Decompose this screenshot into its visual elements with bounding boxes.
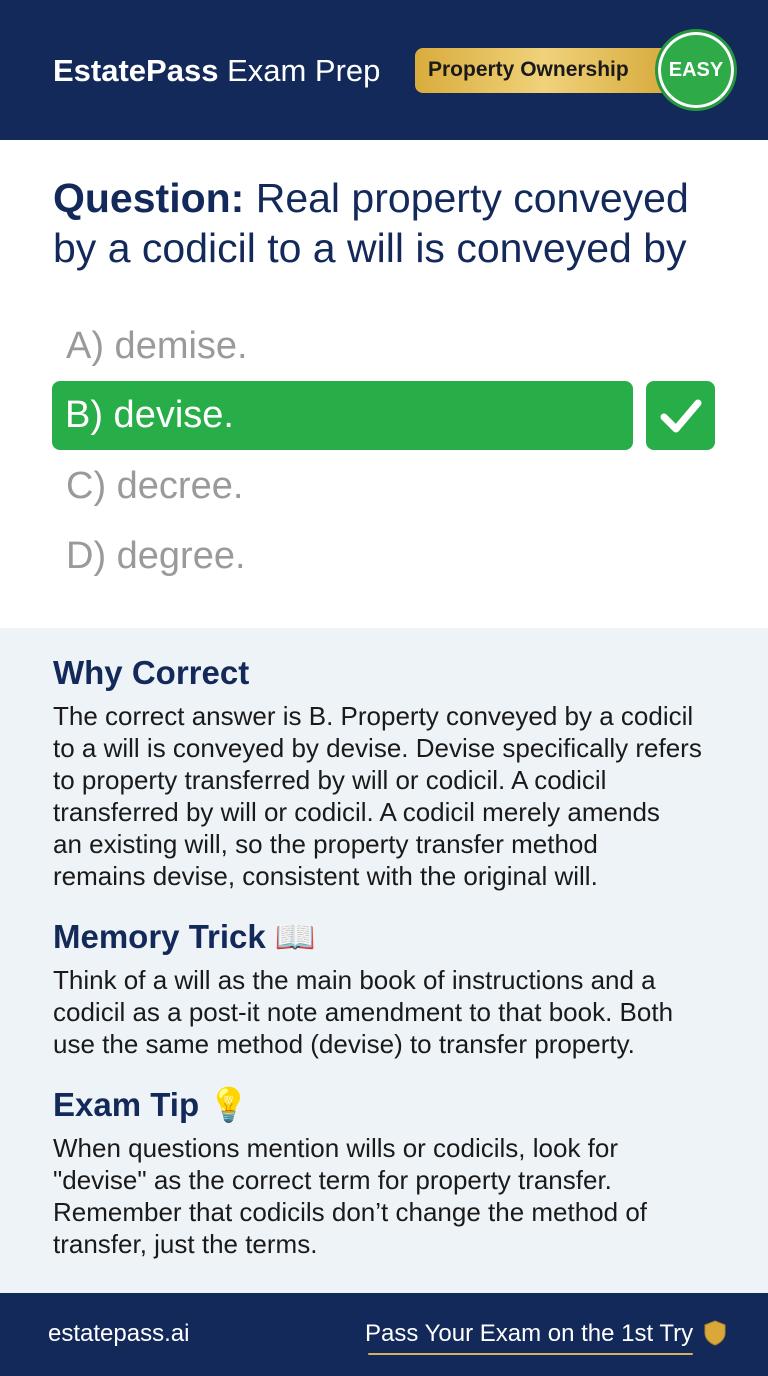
text: exam tip: Remember that codicils don’t change the method of [53,1197,647,1227]
question: by a codicil to a will is conveyed by [53,225,687,271]
explanation panel [0,628,768,1293]
text: why correct: remains devise, consistent with the original will. [53,861,598,891]
heading: memory trick: Memory Trick 📖 [53,918,316,955]
text: exam tip: When questions mention wills or codicils, look for [53,1133,618,1163]
text: memory trick: codicil as a post-it note amendment to that book. Both [53,997,673,1027]
text: exam tip [53,1133,647,1259]
heading: exam tip: Exam Tip 💡 [53,1086,249,1123]
underline [368,1353,693,1355]
text: memory trick [53,965,673,1059]
option C: C) decree. [66,465,243,507]
footer [0,1293,768,1376]
header bar [0,0,768,140]
text: memory trick: Think of a will as the main book of instructions and a [53,965,656,995]
text: exam tip: "devise" as the correct term for property transfer. [53,1165,612,1195]
text: why correct: transferred by will or codicil. A codicil merely amends [53,797,660,827]
option B correct [52,381,633,450]
heading: why correct: Why Correct [53,654,249,691]
text: why correct: to property transferred by will or codicil. A codicil [53,765,606,795]
icon: shield [704,1320,726,1346]
text: memory trick: use the same method (devise) to transfer property. [53,1029,635,1059]
text: why correct [53,701,702,891]
footer url: estatepass.ai [48,1320,189,1347]
text: exam tip: transfer, just the terms. [53,1229,317,1259]
topic badge: Property Ownership [428,58,629,81]
brand title: EstatePass Exam Prep [53,53,380,88]
text: why correct: The correct answer is B. Property conveyed by a codicil [53,701,693,731]
option B correct: B) devise. [65,394,234,436]
option D: D) degree. [66,535,246,577]
topic badge [415,48,675,93]
difficulty badge: EASY [669,59,723,81]
option A: A) demise. [66,325,248,367]
question [53,175,689,271]
icon: check [646,381,715,450]
difficulty badge [655,29,737,111]
question: Question: Real property conveyed [53,175,689,221]
text: why correct: to a will is conveyed by devise. Devise specifically refers [53,733,702,763]
tagline: Pass Your Exam on the 1st Try [365,1320,693,1347]
text: why correct: an existing will, so the property transfer method [53,829,598,859]
